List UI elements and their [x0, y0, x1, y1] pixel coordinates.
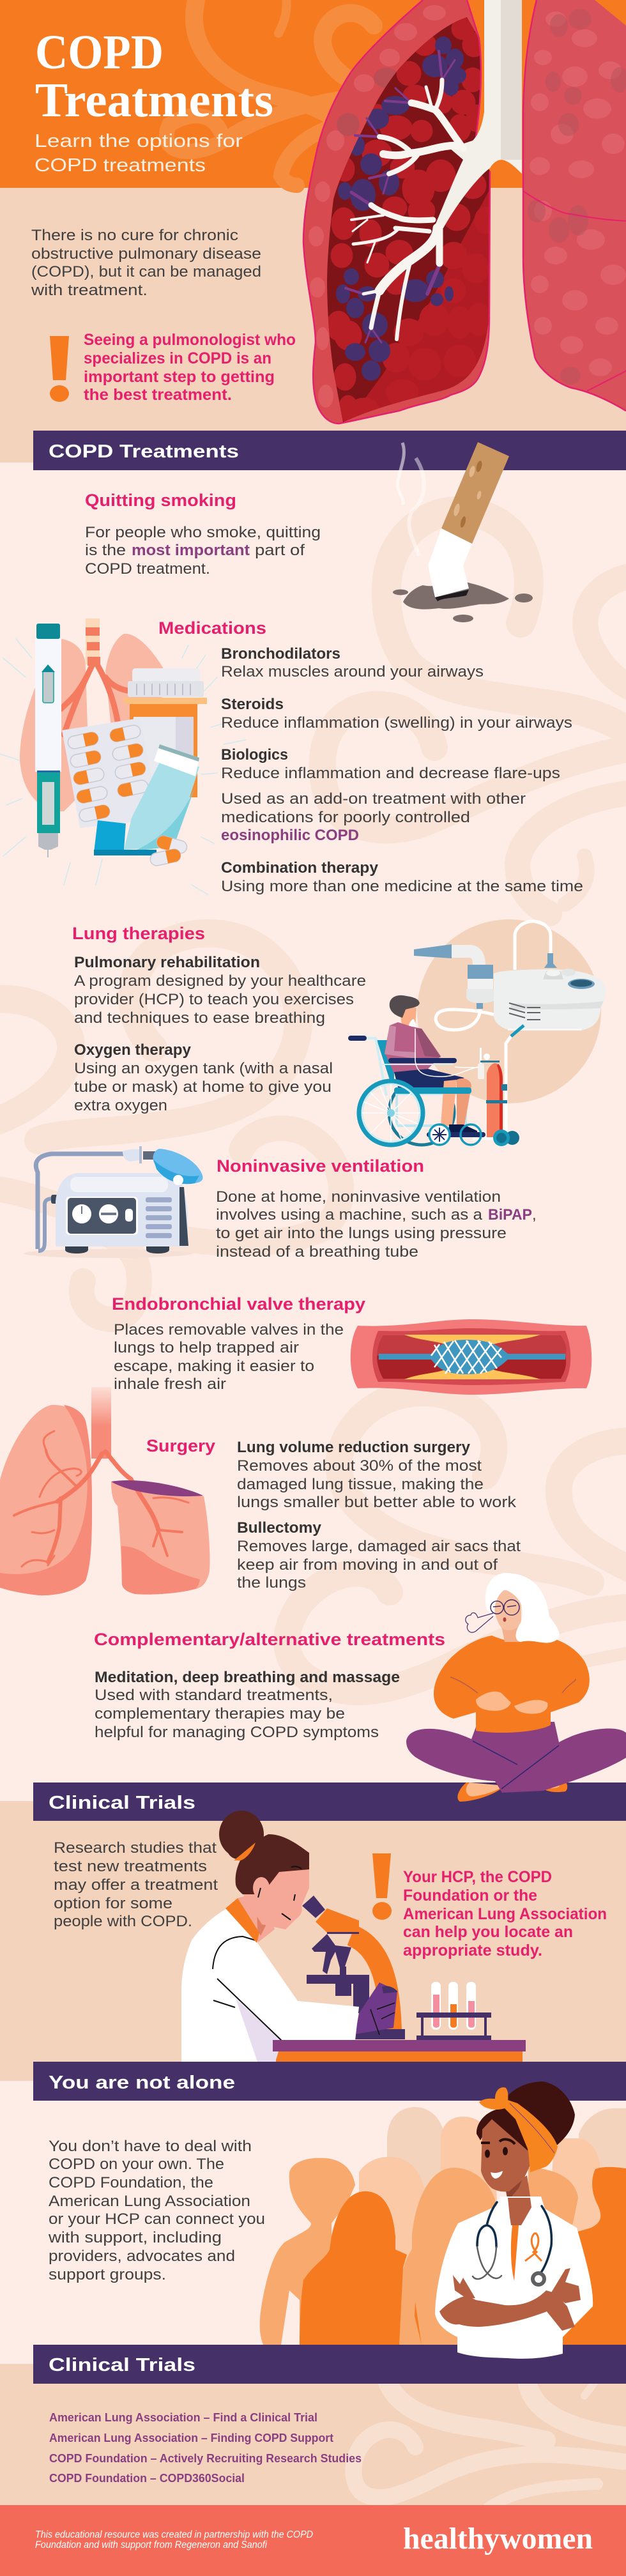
facial features	[485, 2149, 490, 2158]
footer disclaimer: Foundation and with support from Regeneron and Sanofi	[35, 2540, 268, 2550]
text: noninvasive ventilation: Done at home, noninvasive ventilation	[216, 1188, 501, 1206]
inhaler	[94, 744, 199, 867]
text: surgery: damaged lung tissue, making the	[237, 1476, 484, 1493]
text: medications: eosinophilic COPD	[221, 827, 359, 844]
text: surgery: the lungs	[237, 1574, 306, 1591]
logo: healthywomen: healthywomen	[403, 2522, 593, 2556]
neck	[506, 2175, 531, 2225]
arms	[439, 2290, 575, 2331]
subtitle	[34, 131, 243, 176]
callout: see a pulmonologist: Seeing a pulmonologist who	[84, 331, 296, 349]
text: quitting smoking: COPD treatment.	[85, 560, 210, 578]
text: noninvasive ventilation: instead of a breathing tube	[216, 1243, 418, 1261]
illustration: woman meditating	[406, 1573, 626, 1802]
intro text: (COPD), but it can be managed	[31, 263, 261, 280]
text: noninvasive ventilation	[216, 1156, 537, 1261]
heading: Clinical Trials: Clinical Trials	[49, 1793, 195, 1813]
header background: orange	[0, 0, 626, 188]
text: medications: Medications	[158, 618, 266, 638]
text: surgery: Surgery	[146, 1436, 215, 1455]
resource links: COPD Foundation – Actively Recruiting Research Studies	[49, 2452, 362, 2465]
text: you are not alone: with support, including	[48, 2229, 222, 2246]
intro text: obstructive pulmonary disease	[31, 245, 261, 263]
text: surgery: Lung volume reduction surgery	[237, 1439, 471, 1456]
text: surgery: Removes about 30% of the most	[237, 1457, 482, 1475]
collar	[225, 1898, 259, 1943]
text: medications: Using more than one medicine at the same time	[221, 878, 583, 895]
patient	[385, 995, 477, 1135]
text: lung therapies: Oxygen therapy	[74, 1041, 192, 1059]
text: endobronchial valve therapy: escape, making it easier to	[114, 1358, 314, 1375]
text: endobronchial valve therapy: lungs to help trapped air	[114, 1339, 299, 1356]
intro text	[31, 227, 261, 299]
legs	[406, 1722, 626, 1793]
heading: You are not alone: You are not alone	[49, 2073, 235, 2093]
text: medications: Bronchodilators	[221, 645, 340, 663]
face	[243, 1869, 309, 1929]
text: noninvasive ventilation: BiPAP	[488, 1206, 532, 1223]
ear and eye	[253, 1877, 270, 1899]
trachea shade	[501, 0, 522, 160]
illustration: left lung with damaged airways	[300, 0, 522, 428]
title	[35, 26, 273, 127]
text: quitting smoking: part of	[255, 542, 305, 559]
text: you are not alone: COPD on your own. The	[49, 2156, 224, 2173]
airways: damaged tips	[346, 51, 455, 342]
title: COPD	[35, 26, 164, 79]
text: research studies: option for some	[54, 1895, 172, 1912]
subtitle: COPD treatments	[34, 155, 206, 176]
callout: HCP can help locate a study: Your HCP, the COPD	[403, 1868, 552, 1886]
text: lung therapies	[72, 924, 366, 1114]
feet	[457, 1782, 505, 1802]
mask	[153, 1149, 203, 1184]
callout: see a pulmonologist: the best treatment.	[84, 386, 232, 404]
text: surgery: keep air from moving in and out of	[237, 1556, 498, 1574]
oxygen tank	[455, 1048, 519, 1146]
prescription bottle	[124, 668, 207, 797]
header swirls	[167, 0, 374, 185]
resource links	[49, 2411, 362, 2485]
hair	[485, 1573, 560, 1643]
callout: see a pulmonologist	[84, 331, 296, 404]
table	[276, 2051, 523, 2062]
headband	[479, 2087, 558, 2172]
text: complementary treatments: Meditation, deep breathing and massage	[95, 1669, 400, 1686]
illustration: wheelchair patient with nebulizer and oxygen	[348, 919, 606, 1146]
text: quitting smoking: is the	[85, 542, 126, 559]
hair bun	[508, 2082, 575, 2145]
text: endobronchial valve therapy: Places removable valves in the	[114, 1321, 344, 1338]
lighter red tissue overlay	[365, 190, 489, 408]
illustration: right lung	[521, 0, 626, 415]
text: you are not alone: or your HCP can connect you	[49, 2211, 265, 2228]
text: endobronchial valve therapy	[112, 1294, 365, 1393]
text: complementary treatments: complementary therapies may be	[95, 1705, 345, 1722]
resource links: COPD Foundation – COPD360Social	[49, 2472, 245, 2485]
icon: cigarette	[393, 442, 533, 622]
text: lung therapies: tube or mask) at home to give you	[74, 1078, 332, 1096]
text: lung therapies: Lung therapies	[72, 924, 205, 943]
text: noninvasive ventilation: ,	[532, 1206, 537, 1223]
text: complementary treatments: Used with standard treatments,	[95, 1687, 333, 1704]
text: lung therapies: extra oxygen	[74, 1097, 167, 1114]
background: clinical trials peach	[0, 1801, 626, 2081]
text: surgery	[146, 1436, 521, 1591]
hands	[476, 1692, 511, 1711]
text: you are not alone: COPD Foundation, the	[49, 2174, 213, 2191]
text: research studies: may offer a treatment	[54, 1876, 218, 1894]
intro text: There is no cure for chronic	[31, 227, 238, 244]
callout: HCP can help locate a study: appropriate study.	[403, 1942, 542, 1959]
text: lung therapies: A program designed by your healthcare	[74, 972, 366, 990]
text: medications	[158, 618, 583, 895]
footer background	[0, 2505, 626, 2576]
text: lung therapies: and techniques to ease breathing	[74, 1009, 325, 1027]
text: research studies	[54, 1839, 218, 1930]
lab coat	[181, 1908, 359, 2062]
breath puff	[466, 1613, 493, 1632]
heading: COPD Treatments: COPD Treatments	[49, 441, 239, 462]
text: quitting smoking: For people who smoke, quitting	[85, 524, 321, 541]
swirls: treatments section	[0, 511, 626, 1692]
text: medications: Steroids	[221, 696, 284, 713]
neck	[238, 1891, 275, 1942]
oxygen hose	[415, 1029, 478, 1077]
outline: right lung	[523, 0, 626, 411]
text: surgery: lungs smaller but better able to work	[237, 1494, 517, 1511]
text: noninvasive ventilation: to get air into the lungs using pressure	[216, 1225, 507, 1242]
callout: HCP can help locate a study: Foundation or the	[403, 1887, 537, 1905]
intro text: with treatment.	[31, 282, 148, 299]
nebulizer	[414, 921, 606, 1031]
ribbon	[525, 2233, 542, 2261]
banner: COPD Treatments	[33, 431, 626, 470]
callout: HCP can help locate a study: American Lung Association	[403, 1905, 607, 1923]
text: complementary treatments: helpful for managing COPD symptoms	[95, 1724, 379, 1741]
illustration: noninvasive ventilator machine	[24, 1146, 203, 1258]
glasses	[491, 1600, 519, 1615]
coat	[435, 2196, 593, 2359]
illustration: endobronchial valve in airway	[351, 1319, 592, 1395]
text: lung therapies: provider (HCP) to teach you exercises	[74, 991, 354, 1008]
text: you are not alone: You don’t have to deal with	[49, 2138, 252, 2155]
callout: HCP can help locate a study	[403, 1868, 607, 1959]
neck and face	[501, 1626, 521, 1642]
text: you are not alone: American Lung Association	[49, 2193, 250, 2210]
text: lung therapies: Using an oxygen tank (with a nasal	[74, 1060, 333, 1077]
illustration: medications	[0, 618, 246, 894]
hair front	[477, 2108, 528, 2152]
swirls: resources section	[353, 2380, 626, 2508]
icon: exclamation mark	[372, 1853, 392, 1920]
text: surgery: Bullectomy	[237, 1519, 322, 1537]
text: noninvasive ventilation: Noninvasive ventilation	[217, 1156, 424, 1176]
text: surgery: Removes large, damaged air sacs that	[237, 1538, 521, 1555]
scrub stripe	[511, 2225, 519, 2281]
banner: Clinical Trials resources	[33, 2345, 626, 2384]
text: research studies: people with COPD.	[54, 1913, 192, 1930]
text: medications: Reduce inflammation (swelling) in your airways	[221, 714, 572, 732]
title: Treatments	[35, 73, 273, 127]
footer disclaimer: This educational resource was created in partnership with the COPD	[35, 2529, 313, 2540]
torso	[434, 1636, 590, 1733]
text: medications: Combination therapy	[221, 859, 379, 877]
airways: trachea	[434, 0, 522, 228]
text: medications: Relax muscles around your airways	[221, 663, 484, 680]
text: lung therapies: Pulmonary rehabilitation	[74, 954, 260, 971]
cart rod	[506, 1036, 511, 1138]
background: resources peach	[0, 2364, 626, 2505]
stethoscope	[473, 2202, 551, 2279]
hair tie	[234, 1843, 256, 1860]
text: quitting smoking: most important	[132, 542, 250, 559]
resource links: American Lung Association – Finding COPD Support	[49, 2432, 333, 2444]
text: you are not alone	[48, 2138, 265, 2283]
illustration: doctor with crossed arms	[435, 2082, 593, 2359]
banner: You are not alone	[33, 2062, 626, 2101]
subtitle: Learn the options for	[34, 131, 243, 151]
background: intro peach	[0, 188, 626, 463]
callout: see a pulmonologist: important step to getting	[84, 368, 275, 386]
airways: bronchial tree	[351, 80, 463, 339]
illustration: lungs after surgery	[0, 1387, 210, 1595]
lung outline	[303, 0, 490, 424]
text: quitting smoking	[85, 491, 321, 578]
callout: HCP can help locate a study: can help you locate an	[403, 1923, 573, 1941]
text: research studies: test new treatments	[54, 1858, 207, 1875]
icon: exclamation mark	[50, 336, 69, 402]
text: research studies: Research studies that	[54, 1839, 217, 1857]
text: medications: Biologics	[221, 746, 288, 763]
text: medications: Used as an add-on treatment with other	[221, 790, 526, 808]
text: endobronchial valve therapy: inhale fresh air	[114, 1376, 226, 1393]
banner: Clinical Trials	[33, 1782, 626, 1821]
wheelchair rear	[389, 1080, 454, 1145]
blister pack with capsules	[62, 718, 160, 828]
hair	[219, 1811, 309, 1894]
text: you are not alone: providers, advocates and	[49, 2248, 235, 2265]
collar neck gap	[508, 2198, 531, 2225]
text: noninvasive ventilation: involves using a machine, such as a	[216, 1206, 483, 1223]
text: complementary treatments	[94, 1630, 445, 1741]
test tubes	[416, 1982, 491, 2040]
lung cavity	[323, 13, 495, 428]
callout: see a pulmonologist: specializes in COPD is an	[84, 349, 271, 367]
heading: Clinical Trials resources: Clinical Trials	[49, 2355, 195, 2375]
face	[481, 2119, 531, 2192]
text: you are not alone: support groups.	[49, 2266, 166, 2283]
footer disclaimer	[35, 2529, 313, 2550]
text: complementary treatments: Complementary/alternative treatments	[94, 1630, 445, 1649]
injection pen	[35, 624, 61, 857]
illustration: scientist with microscope	[181, 1811, 526, 2062]
wheelchair front	[359, 1058, 485, 1145]
text: endobronchial valve therapy: Endobronchial valve therapy	[112, 1294, 365, 1314]
text: medications: Reduce inflammation and decrease flare-ups	[221, 765, 560, 782]
microscope	[351, 1935, 391, 2032]
text: quitting smoking: Quitting smoking	[85, 491, 236, 510]
text: medications: medications for poorly controlled	[221, 809, 470, 826]
resource links: American Lung Association – Find a Clinical Trial	[49, 2411, 317, 2424]
illustration: crowd silhouettes	[260, 2107, 626, 2345]
